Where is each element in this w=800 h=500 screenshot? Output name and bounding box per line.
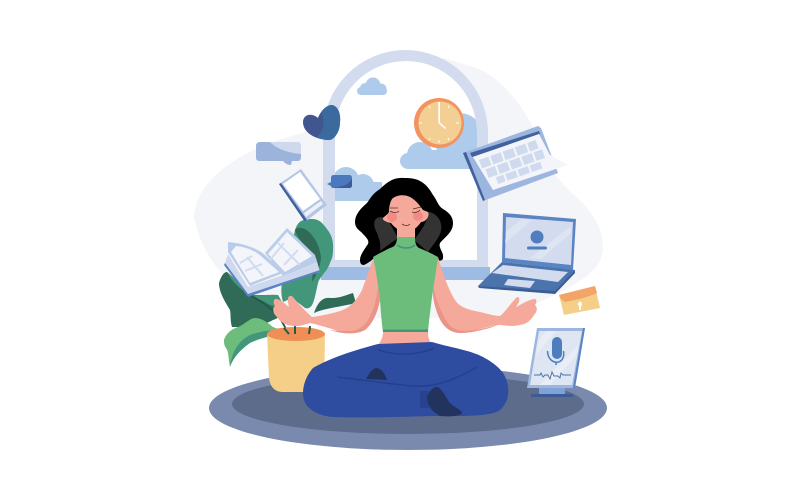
pot soil — [267, 327, 325, 341]
stand — [539, 388, 565, 394]
envelope — [559, 286, 600, 315]
rug inner — [232, 374, 584, 434]
hair shadow — [374, 212, 441, 252]
voice wave — [534, 372, 571, 379]
calendar — [463, 126, 568, 201]
clock hands — [438, 102, 446, 129]
neck — [397, 225, 415, 237]
left arm — [273, 256, 378, 333]
window sill — [321, 267, 490, 280]
stems over pot — [284, 327, 310, 334]
window opening — [335, 61, 477, 260]
right arm — [433, 257, 537, 332]
eyes and mouth — [390, 207, 421, 226]
heart — [303, 105, 340, 140]
laptop base — [478, 262, 575, 293]
plant — [219, 219, 356, 367]
light leaf — [224, 318, 287, 367]
speech bubble — [256, 142, 301, 165]
back leaf — [281, 219, 333, 308]
midriff — [378, 332, 431, 345]
clouds outside window — [330, 78, 484, 201]
microphone tablet — [527, 328, 585, 397]
left foot — [366, 368, 387, 380]
collar — [397, 245, 415, 248]
window — [321, 50, 490, 280]
laptop — [478, 213, 576, 294]
left leaf — [219, 272, 283, 327]
cheeks — [387, 211, 423, 222]
mini chat bubble — [327, 175, 352, 188]
book left pages — [228, 242, 283, 286]
small cloud — [357, 78, 387, 95]
book — [224, 228, 320, 297]
right cloud — [400, 113, 484, 169]
hair back — [355, 178, 453, 265]
right small leaf — [314, 293, 356, 313]
pot — [267, 327, 325, 392]
right ankle — [420, 391, 429, 408]
microphone — [552, 337, 562, 359]
top hem — [383, 330, 428, 332]
calendar page — [473, 134, 568, 190]
face — [383, 195, 429, 232]
book right pages — [265, 228, 317, 276]
right foot — [427, 387, 462, 416]
person — [273, 178, 537, 417]
background blob — [194, 55, 603, 318]
left cloud — [335, 167, 382, 201]
avatar — [530, 230, 544, 244]
ground rug — [209, 366, 607, 450]
pants — [303, 342, 508, 417]
waistband line — [337, 348, 477, 386]
clock — [414, 98, 464, 148]
stems — [250, 295, 310, 335]
phone — [279, 169, 327, 222]
torso top — [373, 237, 438, 332]
